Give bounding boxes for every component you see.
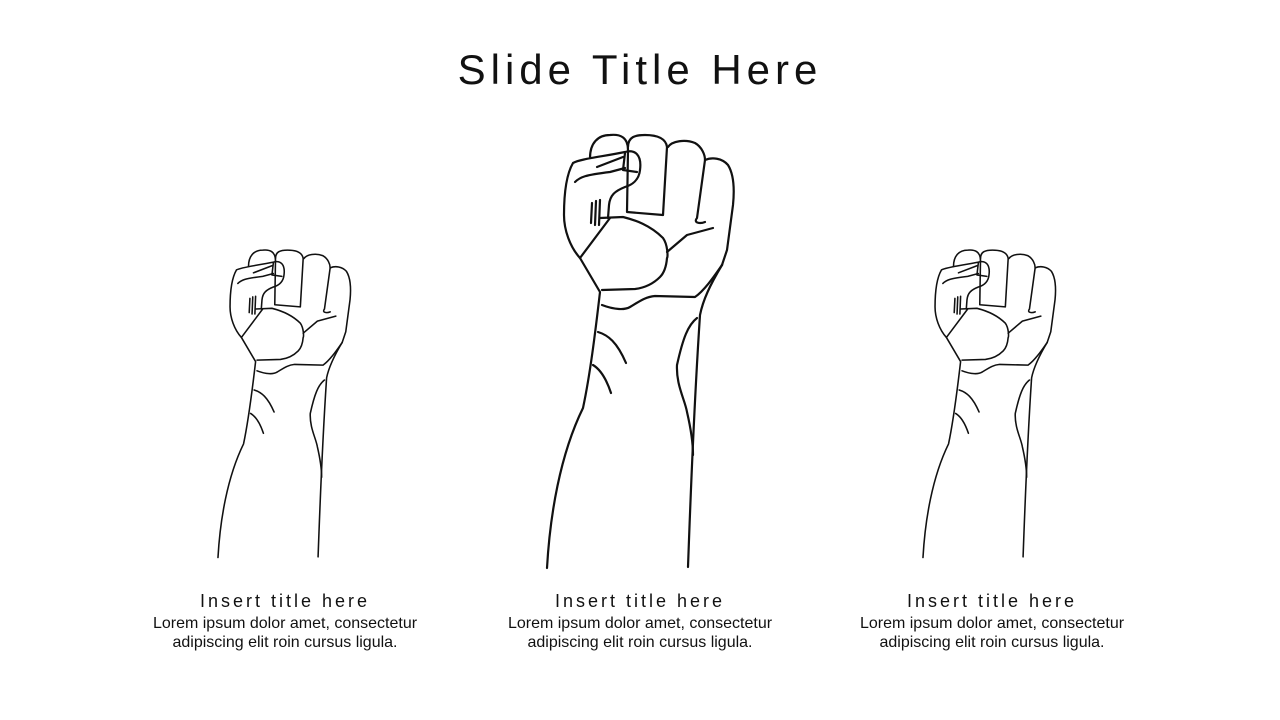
caption: right: Lorem ipsum dolor amet, consectetur	[860, 615, 1124, 632]
caption: left	[153, 591, 417, 651]
caption: right: Insert title here	[907, 591, 1077, 611]
caption: center: Lorem ipsum dolor amet, consectetur	[508, 615, 772, 632]
caption: left: Lorem ipsum dolor amet, consectetur	[153, 615, 417, 632]
caption: center	[508, 591, 772, 651]
caption: center: Insert title here	[555, 591, 725, 611]
title: Slide Title Here	[458, 46, 822, 93]
caption: right	[860, 591, 1124, 651]
fist: left	[218, 250, 351, 558]
caption: right: adipiscing elit roin cursus ligula.	[880, 634, 1104, 651]
caption: left: adipiscing elit roin cursus ligula.	[172, 634, 398, 651]
fist: right	[923, 250, 1056, 558]
caption: left: Insert title here	[200, 591, 370, 611]
caption: center: adipiscing elit roin cursus ligula.	[528, 634, 752, 651]
fist: center	[547, 135, 734, 568]
